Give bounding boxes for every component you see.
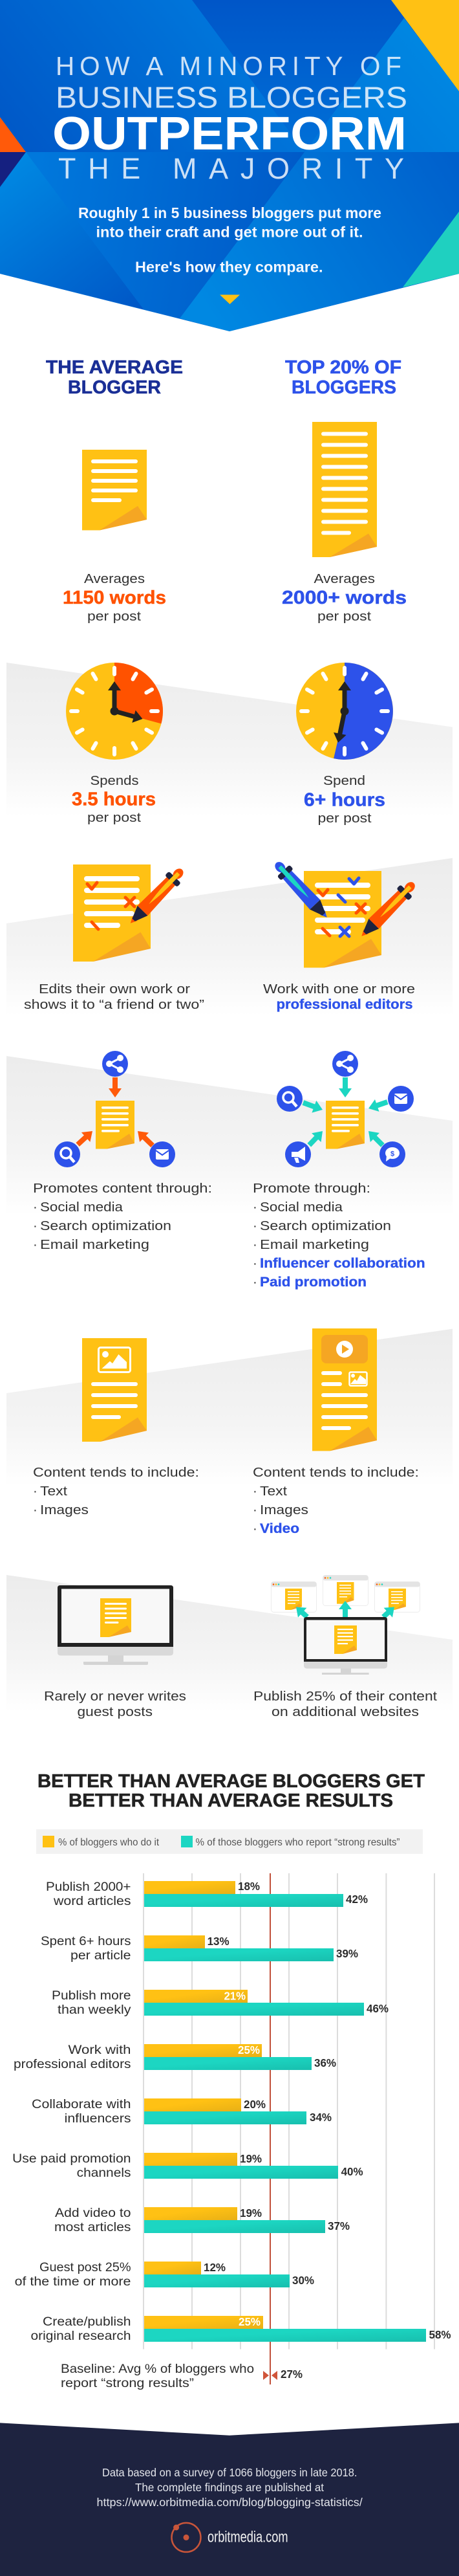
list: average promotion: ·: [33, 1200, 37, 1215]
row: publish more than weekly: than weekly: [58, 2003, 131, 2017]
row: paid promotion: 19%: [240, 2152, 262, 2165]
title: THE MAJORITY: [58, 152, 404, 185]
text: average word count: [63, 571, 166, 624]
list: average promotion: Search optimization: [40, 1218, 171, 1233]
text: top guest posting: on additional websites: [272, 1704, 419, 1719]
icon: megaphone: [292, 1147, 305, 1163]
decorative yellow triangle: [391, 0, 459, 91]
row: original research: 58%: [429, 2328, 451, 2341]
column heading: top 20%: TOP 20% OF: [285, 357, 401, 378]
icon: clock 3.5 hours: [66, 663, 163, 760]
list: top promotion: Promote through:: [253, 1181, 370, 1196]
row: guest posts: 30%: [292, 2274, 314, 2287]
row: 6+ hours: 39%: [336, 1947, 358, 1960]
list: average promotion: [33, 1181, 212, 1252]
text: top time: 6+ hours: [304, 789, 385, 810]
list: average content: [33, 1465, 199, 1517]
list: average promotion: Promotes content through:: [33, 1181, 212, 1196]
documents in windows: [285, 1582, 406, 1610]
list: average promotion: Social media: [40, 1200, 123, 1215]
row: paid promotion: 40%: [341, 2165, 363, 2178]
teal arrows: [292, 1601, 399, 1622]
list: top promotion: ·: [253, 1218, 257, 1233]
row: publish 2000+: [46, 1880, 368, 1908]
baseline callout: report “strong results”: [61, 2376, 194, 2390]
diagram: average promotion: [54, 1051, 175, 1167]
text: top editing: [263, 982, 415, 1012]
title: HOW A MINORITY OF: [56, 51, 401, 81]
text: average word count: 1150 words: [63, 588, 166, 608]
decorative teal triangle: [403, 212, 459, 287]
row: influencers: Collaborate with: [32, 2097, 131, 2111]
column heading: top 20%: [285, 357, 401, 398]
row: professional editors: 36%: [314, 2056, 336, 2069]
icon: single monitor: [58, 1585, 173, 1665]
baseline callout: 27%: [281, 2368, 303, 2381]
baseline callout: Baseline: Avg % of bloggers who: [61, 2362, 254, 2376]
row: video: Add video to: [55, 2206, 131, 2220]
footer panel: [0, 2423, 459, 2576]
row: 6+ hours: [41, 1934, 358, 1963]
row: professional editors: 25%: [238, 2043, 260, 2056]
row: publish more than weekly: 46%: [367, 2002, 389, 2015]
row: influencers: 34%: [310, 2111, 332, 2124]
logo: orbit media: [172, 2523, 288, 2552]
column heading: average: BLOGGER: [68, 377, 161, 398]
row: original research: [31, 2315, 451, 2343]
list: top content: Text: [260, 1484, 287, 1499]
row: influencers: [32, 2097, 332, 2126]
text: top time: [304, 773, 385, 826]
list: top promotion: [253, 1181, 425, 1290]
list: top promotion: ·: [253, 1256, 257, 1271]
text: average time: 3.5 hours: [72, 789, 156, 810]
logo: orbit media: orbitmedia.com: [208, 2529, 288, 2546]
panel: content background: [6, 1329, 453, 1486]
row: 6+ hours: per article: [70, 1948, 131, 1963]
text: top guest posting: Publish 25% of their content: [253, 1689, 437, 1704]
footer text: Data based on a survey of 1066 bloggers in late 2018.: [102, 2466, 357, 2479]
row: guest posts: [15, 2260, 314, 2289]
text: average time: [72, 773, 156, 825]
diagram: top promotion: [277, 1051, 414, 1167]
row: paid promotion: Use paid promotion: [12, 2152, 131, 2166]
list: top content: ·: [253, 1503, 257, 1517]
list: top promotion: ·: [253, 1237, 257, 1252]
row: video: 37%: [328, 2219, 350, 2232]
baseline callout: [61, 2362, 303, 2390]
text: average time: per post: [87, 810, 141, 825]
monitor: [304, 1617, 387, 1675]
list: average content: Images: [40, 1503, 89, 1517]
footer text: The complete findings are published at: [135, 2481, 324, 2494]
list: top promotion: Influencer collaboration: [260, 1256, 425, 1271]
icon: document with video and image: [312, 1328, 377, 1451]
text: top time: Spend: [323, 773, 365, 788]
panel: guest post background: [6, 1575, 453, 1712]
legend: % of bloggers who do it: [58, 1837, 160, 1848]
heading: chart title: [37, 1771, 425, 1811]
list: top content: [253, 1465, 419, 1536]
list: top promotion: Email marketing: [260, 1237, 369, 1252]
title: [52, 51, 407, 185]
list: top promotion: Social media: [260, 1200, 343, 1215]
row: video: [54, 2206, 350, 2234]
row: guest posts: of the time or more: [15, 2274, 131, 2289]
icon: self-edited document with pen: [73, 864, 188, 962]
list: top content: Content tends to include:: [253, 1465, 419, 1480]
list: top promotion: Paid promotion: [260, 1275, 367, 1290]
list: top promotion: ·: [253, 1275, 257, 1290]
icon: clock 6+ hours: [296, 663, 393, 760]
decorative orange triangle: [0, 117, 26, 152]
icon: monitor publishing to three websites: [272, 1575, 420, 1675]
list: average promotion: ·: [33, 1237, 37, 1252]
row: original research: 25%: [239, 2315, 261, 2328]
heading: chart title: BETTER THAN AVERAGE RESULTS: [69, 1790, 393, 1811]
row: professional editors: professional editors: [14, 2057, 131, 2071]
panel: editing background: [6, 858, 453, 1016]
icon: long document: [312, 422, 377, 557]
text: average editing: [24, 982, 204, 1012]
column heading: average: THE AVERAGE: [46, 357, 183, 378]
text: average word count: per post: [87, 609, 141, 624]
row: publish more than weekly: 21%: [224, 1989, 246, 2002]
row: publish more than weekly: [52, 1988, 389, 2017]
column heading: top 20%: BLOGGERS: [292, 377, 396, 398]
row: original research: original research: [31, 2329, 131, 2343]
row: video: 19%: [240, 2207, 262, 2219]
decorative navy triangle: [0, 152, 26, 187]
row: publish 2000+: 18%: [238, 1880, 260, 1893]
panel: time background: [6, 663, 453, 817]
icon: document with image: [82, 1338, 147, 1442]
list: top content: Images: [260, 1503, 308, 1517]
text: average guest posting: guest posts: [78, 1704, 153, 1719]
bar chart: [12, 1873, 451, 2384]
text: average editing: shows it to “a friend or two”: [24, 997, 204, 1012]
row: paid promotion: [12, 2152, 363, 2180]
row: publish 2000+: word articles: [53, 1894, 131, 1908]
intro text: Roughly 1 in 5 business bloggers put more: [78, 204, 381, 221]
row: video: most articles: [54, 2220, 131, 2234]
icon: down arrow: [220, 295, 240, 304]
row: publish more than weekly: Publish more: [52, 1988, 131, 2003]
list: average promotion: Email marketing: [40, 1237, 149, 1252]
title: BUSINESS BLOGGERS: [56, 80, 407, 114]
text: top editing: professional editors: [277, 997, 412, 1012]
row: professional editors: [14, 2043, 336, 2071]
text: average time: Spends: [91, 773, 138, 788]
heading: chart title: BETTER THAN AVERAGE BLOGGERS GET: [37, 1771, 425, 1792]
icon: paid chat bubble: [385, 1147, 400, 1161]
text: top editing: Work with one or more: [263, 982, 415, 996]
row: paid promotion: channels: [77, 2166, 131, 2180]
list: average promotion: ·: [33, 1218, 37, 1233]
row: guest posts: Guest post 25%: [39, 2260, 131, 2274]
icon: short document: [82, 450, 147, 531]
icon: paid chat bubble: $: [390, 1150, 394, 1158]
text: average word count: Averages: [84, 571, 145, 586]
text: top time: per post: [318, 811, 372, 826]
legend: % of those bloggers who report “strong results”: [195, 1837, 400, 1848]
intro text: [78, 204, 381, 276]
text: top word count: [282, 571, 407, 624]
list: top content: Video: [260, 1521, 299, 1536]
header banner: [0, 0, 459, 331]
row: original research: Create/publish: [43, 2315, 131, 2329]
column heading: average: [46, 357, 183, 398]
icon: professionally edited document with two pens: [270, 857, 420, 968]
row: publish 2000+: 42%: [346, 1893, 368, 1906]
list: top content: ·: [253, 1521, 257, 1536]
list: average content: ·: [33, 1503, 37, 1517]
text: top word count: 2000+ words: [282, 588, 407, 608]
intro text: into their craft and get more out of it.: [96, 224, 363, 241]
text: average guest posting: Rarely or never writes: [44, 1689, 186, 1704]
footer text: https://www.orbitmedia.com/blog/blogging-statistics/: [97, 2496, 363, 2509]
row: influencers: 20%: [244, 2098, 266, 2111]
row: guest posts: 12%: [204, 2261, 226, 2274]
row: publish 2000+: Publish 2000+: [46, 1880, 131, 1894]
row: professional editors: Work with: [69, 2043, 131, 2057]
text: top guest posting: [253, 1689, 437, 1719]
list: top promotion: Search optimization: [260, 1218, 391, 1233]
list: top content: ·: [253, 1484, 257, 1499]
baseline marker line: [270, 1873, 271, 2384]
panel: promotion background: [6, 1056, 453, 1215]
browser windows: [272, 1575, 420, 1613]
text: top word count: per post: [317, 609, 371, 624]
list: average content: ·: [33, 1484, 37, 1499]
list: top promotion: ·: [253, 1200, 257, 1215]
text: top word count: Averages: [314, 571, 375, 586]
list: average content: Text: [40, 1484, 67, 1499]
footer text: [97, 2466, 363, 2509]
row: 6+ hours: 13%: [208, 1935, 230, 1948]
list: average content: Content tends to include:: [33, 1465, 199, 1480]
legend: [36, 1829, 423, 1854]
text: average editing: Edits their own work or: [39, 982, 190, 996]
row: 6+ hours: Spent 6+ hours: [41, 1934, 131, 1948]
text: average guest posting: [44, 1689, 186, 1719]
row: influencers: influencers: [65, 2111, 131, 2126]
intro text: Here's how they compare.: [135, 259, 323, 276]
title: OUTPERFORM: [52, 108, 407, 160]
